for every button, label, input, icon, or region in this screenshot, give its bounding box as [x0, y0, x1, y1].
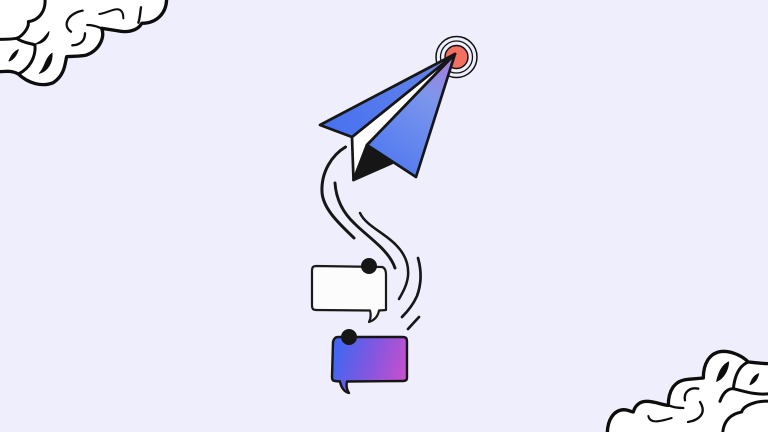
cloud: top left	[0, 0, 167, 85]
bubble dot	[361, 258, 377, 274]
paper plane	[320, 54, 455, 180]
plane: dark underside	[354, 145, 392, 180]
bubble dot	[341, 329, 357, 345]
plane: white fold	[352, 54, 455, 180]
chat bubble: purple	[332, 329, 407, 393]
plane: left wing	[320, 54, 455, 137]
target	[436, 36, 477, 78]
motion trails	[322, 147, 421, 329]
chat bubble: white	[312, 258, 386, 322]
plane: right wing	[367, 54, 455, 177]
cloud: bottom right	[607, 351, 768, 432]
